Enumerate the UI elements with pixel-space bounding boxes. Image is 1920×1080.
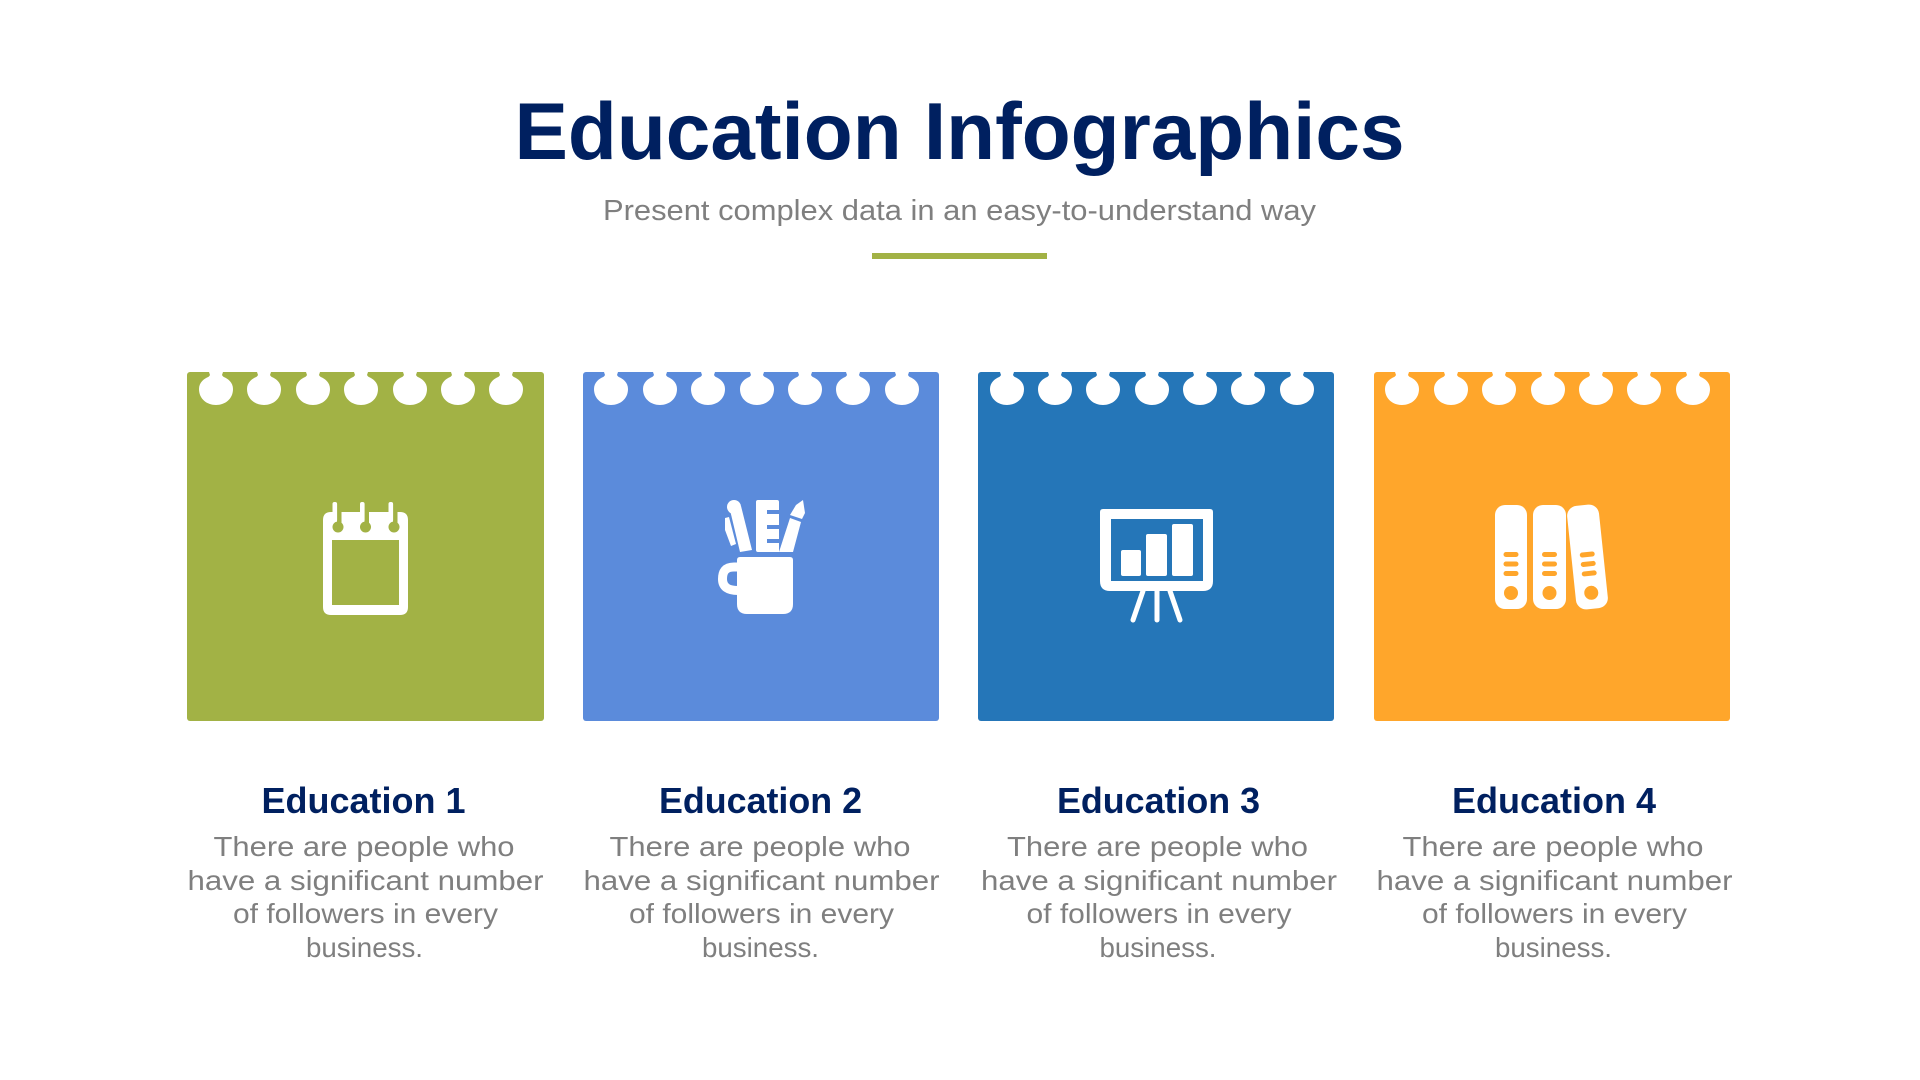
body: education 2: There are people who bbox=[610, 831, 910, 862]
body: education 2 bbox=[584, 831, 940, 963]
spiral holes bbox=[594, 372, 919, 405]
heading: education 4: Education 4 bbox=[1452, 780, 1656, 821]
icon: three binders bbox=[1495, 504, 1609, 610]
body: education 4: of followers in every bbox=[1422, 898, 1687, 929]
text block: education 4 bbox=[1376, 780, 1732, 963]
spiral holes bbox=[1385, 372, 1710, 405]
card background orange bbox=[1374, 372, 1730, 721]
card background green bbox=[187, 372, 544, 721]
body: education 1: There are people who bbox=[214, 831, 514, 862]
accent underline bbox=[872, 253, 1047, 259]
title: Education Infographics bbox=[514, 87, 1404, 177]
card background blue bbox=[583, 372, 939, 721]
body: education 1: business. bbox=[306, 932, 423, 963]
body: education 2: of followers in every bbox=[629, 898, 894, 929]
body: education 1 bbox=[188, 831, 544, 963]
body: education 3: of followers in every bbox=[1026, 898, 1292, 929]
spiral holes bbox=[990, 372, 1314, 405]
body: education 2: business. bbox=[702, 932, 819, 963]
spiral holes bbox=[199, 372, 523, 405]
body: education 4 bbox=[1376, 831, 1732, 963]
body: education 4: have a significant number bbox=[1376, 865, 1732, 896]
heading: education 2: Education 2 bbox=[659, 780, 862, 821]
panel: education 2 note card bbox=[583, 372, 939, 721]
panel: education 4 note card bbox=[1374, 372, 1730, 721]
body: education 4: business. bbox=[1495, 932, 1612, 963]
body: education 1: have a significant number bbox=[188, 865, 544, 896]
icon: mug with pen, ruler and pencil bbox=[722, 500, 805, 614]
icon: calendar bbox=[323, 502, 408, 615]
text block: education 1 bbox=[188, 780, 544, 963]
panel: education 3 note card bbox=[978, 372, 1334, 721]
heading: education 1: Education 1 bbox=[262, 780, 466, 821]
heading: education 3: Education 3 bbox=[1057, 780, 1260, 821]
card background dark blue bbox=[978, 372, 1334, 721]
text block: education 2 bbox=[584, 780, 940, 963]
body: education 1: of followers in every bbox=[233, 898, 498, 929]
body: education 3: There are people who bbox=[1007, 831, 1308, 862]
body: education 3: business. bbox=[1100, 932, 1216, 963]
subtitle: Present complex data in an easy-to-understand way bbox=[603, 195, 1317, 227]
text block: education 3 bbox=[981, 780, 1337, 963]
icon: presentation board with bars bbox=[1100, 509, 1213, 620]
body: education 4: There are people who bbox=[1402, 831, 1704, 862]
body: education 3: have a significant number bbox=[981, 865, 1337, 896]
body: education 3 bbox=[981, 831, 1337, 963]
body: education 2: have a significant number bbox=[584, 865, 940, 896]
panel: education 1 note card bbox=[187, 372, 544, 721]
